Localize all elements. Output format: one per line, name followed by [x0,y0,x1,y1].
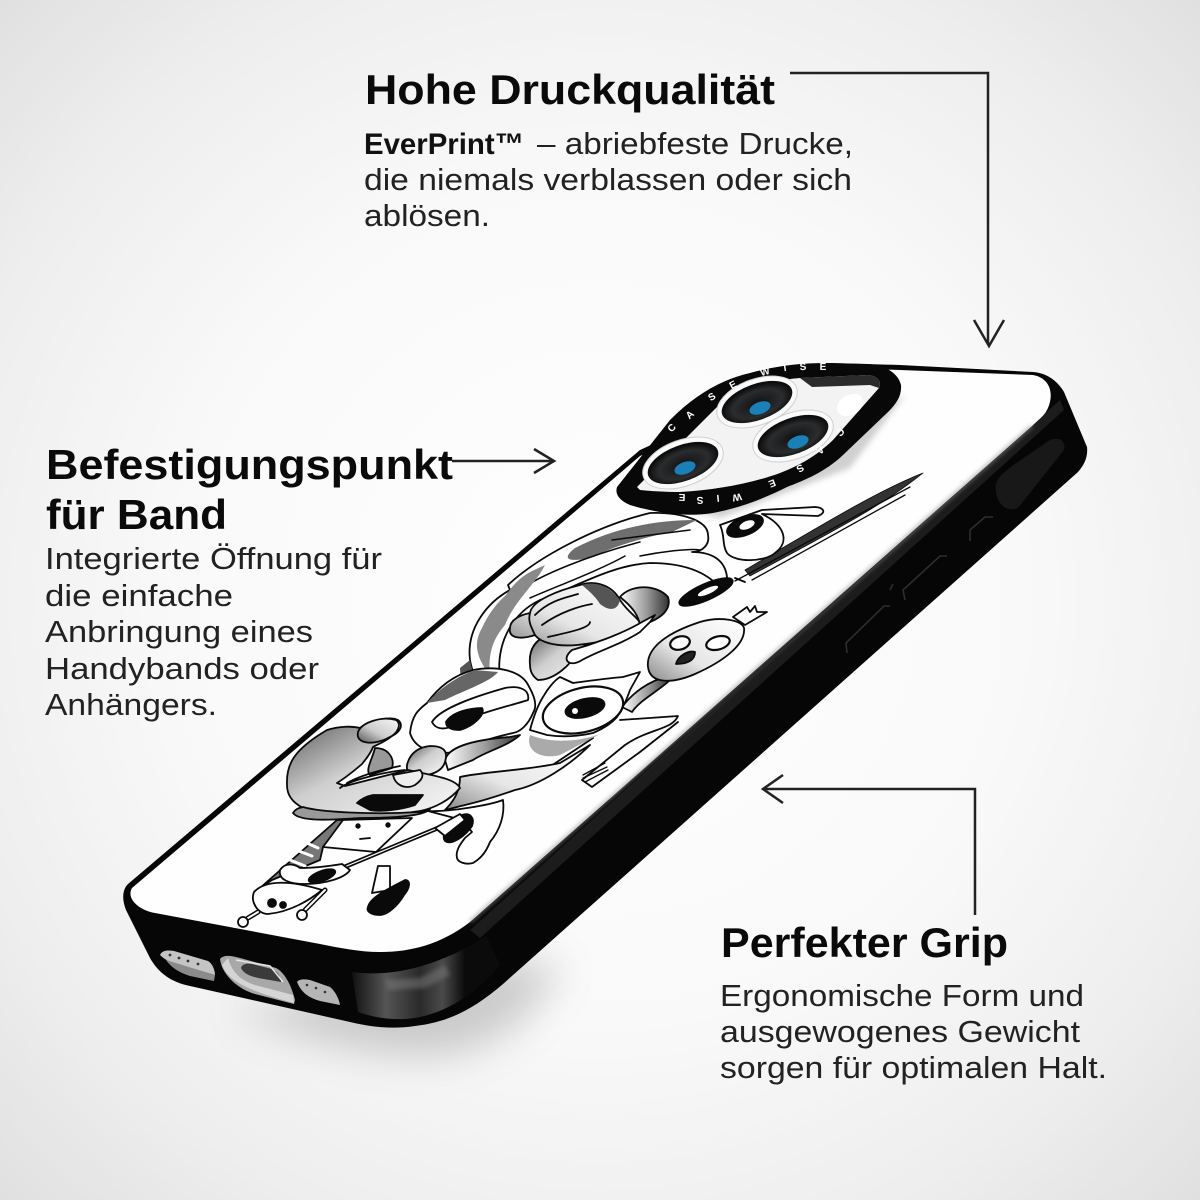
arm band to sleeve [567,615,655,663]
heading: print quality: Hohe Druckqualität [365,66,775,113]
brand lettering: A [813,443,826,456]
body: grip [720,978,1107,1085]
long body and arm [518,716,678,788]
heading: lanyard attachment: für Band [46,491,227,538]
brand lettering: E [678,491,686,502]
brand lettering: S [706,391,718,404]
body: lanyard attachment: Anbringung eines [45,614,313,649]
flash highlight [833,389,867,421]
bottom corner highlight [352,936,500,1019]
phone drop shadow [230,960,560,1056]
camera island [616,362,905,518]
sleeve [620,587,669,628]
black belt patch [357,795,423,811]
long lower body [445,745,590,810]
leg and black shoe [368,866,409,915]
lower belly blob [530,632,590,680]
heading: grip: Perfekter Grip [721,919,1008,966]
body: print quality: ablösen. [364,198,490,233]
brand lettering: C [666,422,679,435]
arrow: lanyard attachment [452,449,554,473]
swirl upper lines [520,530,700,598]
torso blob [445,735,520,770]
brand lettering [666,362,846,505]
body: lanyard attachment: Anhängers. [45,687,217,722]
brand lettering: S [799,362,807,373]
body: lanyard attachment: Integrierte Öffnung für [45,541,382,576]
arrow: print quality [790,73,1004,346]
brand lettering: E [728,379,739,392]
edge shadow on print [470,426,1032,922]
heading: lanyard attachment [46,441,453,538]
needle sword [735,473,923,581]
swirl dark crest [568,520,697,560]
body: print quality: EverPrint™ [364,128,524,161]
text block: print quality [364,66,853,233]
small ghost figure [238,883,325,927]
corner top highlight [385,965,450,990]
artwork: cartoon characters [238,473,923,927]
neck worm under crowned face [622,678,670,712]
guitar [280,814,465,885]
disc hat [293,807,430,820]
brand lettering: I [716,492,720,503]
lens two [746,400,840,472]
brand lettering: S [696,494,704,505]
round face with hood [529,672,640,756]
body: lanyard attachment [45,541,382,722]
black eye on band [676,573,745,611]
swirl left shade [477,565,545,675]
arrow: grip [763,775,975,915]
text block: grip [720,919,1107,1085]
heading: lanyard attachment: Befestigungspunkt [46,441,453,488]
camera window glass [637,375,880,492]
side rail lower sheen [470,400,1064,938]
body: lanyard attachment: die einfache [45,578,233,613]
lens one [710,366,804,438]
text block: lanyard attachment [45,441,453,722]
left speaker grille [160,950,215,981]
brand lettering: C [833,425,846,438]
body: grip: ausgewogenes Gewicht [720,1014,1080,1049]
body: grip: sorgen für optimalen Halt. [720,1050,1107,1085]
top bird face [720,507,823,560]
white printed back [130,368,1051,952]
swirl cloak [460,513,727,700]
body: lanyard attachment: Handybands oder [45,651,319,686]
brand lettering: E [820,362,827,373]
camera bump ring [616,363,901,515]
dark tail [460,660,484,700]
brand lettering: I [783,363,787,374]
right speaker grille [297,979,340,1005]
BMO body [260,818,412,888]
brand lettering: A [684,409,697,422]
crowned round face [648,606,767,681]
brand lettering: W [731,490,743,503]
window top shade [800,375,880,388]
body: grip: Ergonomische Form und [720,978,1084,1013]
case body [123,363,1087,1028]
body: print quality [364,126,853,233]
fist with ridges [510,583,640,645]
right leg loop [428,800,503,864]
volume and action buttons [846,517,993,653]
brand lettering: W [759,366,772,379]
brand lettering: S [794,461,805,474]
neck blob [407,746,446,775]
camera soft shadow [617,395,905,518]
screaming middle character [410,668,535,753]
body: print quality: die niemals verblassen oder sich [364,162,852,197]
looped big arm [287,718,460,814]
side switch bump [996,439,1064,509]
brand lettering: E [766,476,777,489]
charging port [220,956,295,1004]
phone case [123,363,1087,1028]
lens three [636,427,730,499]
body: print quality: – abriebfeste Drucke, [537,126,853,161]
side face sheen [600,400,1048,800]
